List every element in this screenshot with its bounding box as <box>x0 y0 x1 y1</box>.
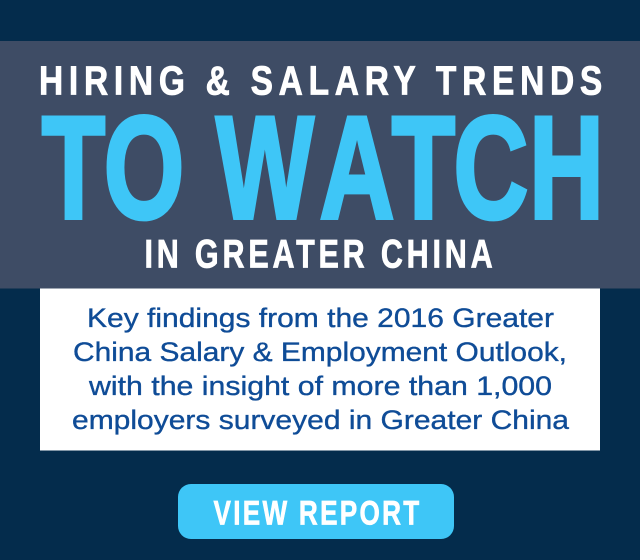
text block: key findings description <box>72 303 569 435</box>
heading: to watch: TO WATCH <box>42 85 604 249</box>
panel: title banner <box>0 41 640 288</box>
text block: key findings description: with the insight of more than 1,000 <box>88 371 552 401</box>
text block: key findings description: China Salary & Employment Outlook, <box>73 337 567 367</box>
button label: VIEW REPORT <box>214 495 422 533</box>
key findings background <box>40 288 600 450</box>
heading: in greater china: IN GREATER CHINA <box>144 233 496 277</box>
text block: key findings description: employers surveyed in Greater China <box>72 405 569 435</box>
panel: key findings <box>40 288 600 450</box>
button background <box>178 484 454 539</box>
button: view report <box>178 484 454 539</box>
banner background <box>0 41 640 288</box>
text block: key findings description: Key findings from the 2016 Greater <box>87 303 554 333</box>
